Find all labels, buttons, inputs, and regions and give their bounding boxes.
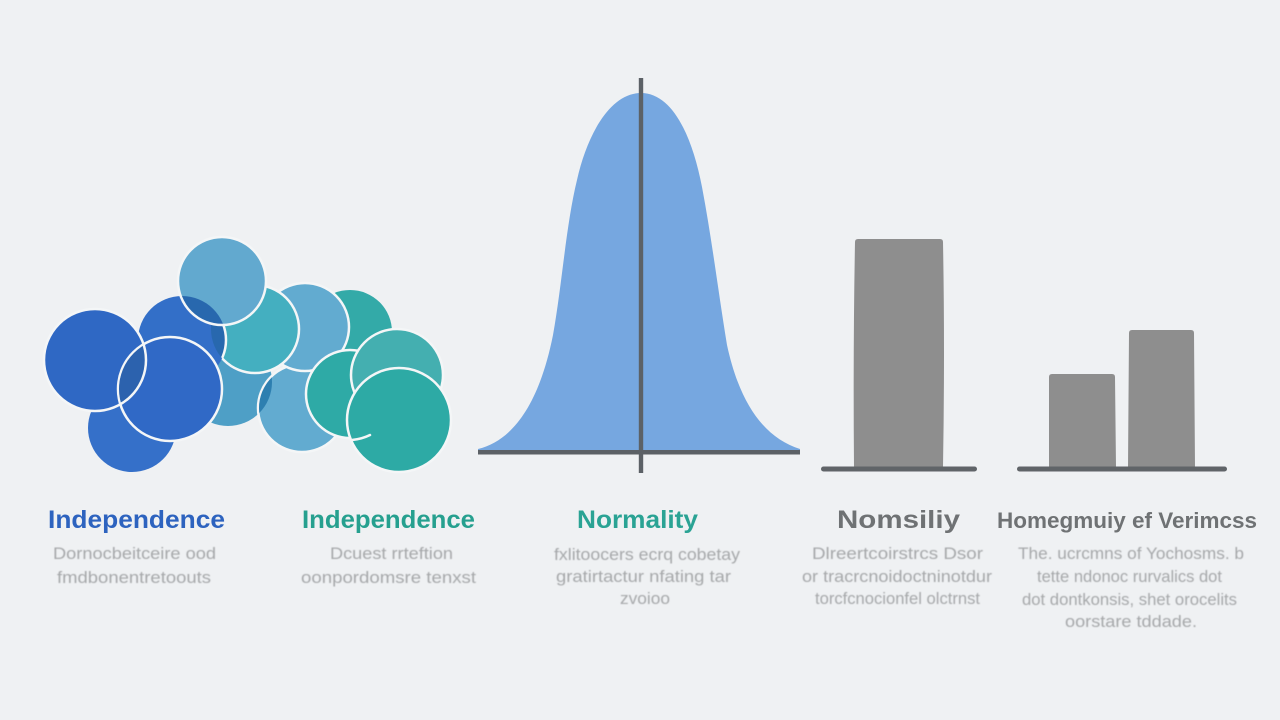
- body text: or tracrcnoidoctninotdur: [802, 567, 992, 586]
- overlapping circles illustration: [44, 237, 451, 472]
- circle: rear teal: [308, 290, 392, 374]
- overlap: rear blue and top circle: [182, 296, 223, 324]
- circle: lower teal: [306, 350, 394, 438]
- body text: [802, 544, 992, 608]
- column 5 text: [997, 508, 1257, 631]
- body text: [1018, 544, 1244, 631]
- center axis: [639, 78, 643, 473]
- overlap: rear blue and cyan teal: [211, 325, 225, 357]
- column 3 text: [554, 506, 741, 608]
- heading: Independence: Independence: [48, 506, 225, 534]
- circle: rear blue: [138, 296, 226, 384]
- body text: oonpordomsre tenxst: [301, 568, 476, 587]
- heading: Normality: Normality: [577, 506, 698, 534]
- paired bar chart: [1017, 330, 1227, 472]
- body text: oorstare tddade.: [1065, 612, 1197, 631]
- body text: Dornocbeitceire ood: [53, 544, 216, 563]
- circle: lower light blue: [258, 364, 346, 452]
- body text: fmdbonentretoouts: [57, 568, 211, 587]
- circle: lower blue: [88, 384, 176, 472]
- single bar chart: [821, 239, 977, 472]
- heading: Nomsiliy: Nomsiliy: [837, 506, 960, 534]
- arc: rear blue edge: [221, 326, 228, 358]
- body text: zvoioo: [620, 589, 670, 608]
- column 1 text: [48, 506, 225, 587]
- outline: top circle: [178, 237, 266, 325]
- baseline: [478, 450, 800, 454]
- body text: dot dontkonsis, shet orocelits: [1022, 590, 1237, 609]
- column 4 text: [802, 506, 992, 608]
- baseline: [1017, 466, 1227, 472]
- bell curve: [478, 93, 800, 452]
- short bar: [1049, 374, 1116, 467]
- tall bar: [854, 239, 944, 467]
- arc: left circle edge over main blue: [120, 345, 148, 405]
- taller bar: [1128, 330, 1195, 467]
- body text: [554, 545, 741, 608]
- circle: main teal: [347, 368, 451, 472]
- circle: mid blue: [184, 338, 272, 426]
- circle: left dark blue: [44, 309, 146, 411]
- column 2 text: [301, 506, 476, 587]
- overlap: left and main blue: [119, 346, 145, 402]
- normal distribution chart: [478, 78, 800, 473]
- body text: [301, 544, 476, 587]
- circle: cyan teal: [211, 285, 299, 373]
- body text: Dlreertcoirstrcs Dsor: [812, 544, 983, 563]
- body text: tette ndonoc rurvalics dot: [1037, 567, 1222, 586]
- body text: The. ucrcmns of Yochosms. b: [1018, 544, 1244, 563]
- heading: Homegmuiy ef Verimcss: Homegmuiy ef Verimcss: [997, 508, 1257, 533]
- body text: [53, 544, 216, 587]
- overlap: mid blue and light blue: [259, 377, 272, 413]
- body text: fxlitoocers ecrq cobetay: [554, 545, 741, 564]
- arc: small white curve: [352, 435, 370, 440]
- circle: top light blue: [178, 237, 266, 325]
- circle: main blue: [118, 337, 222, 441]
- baseline: [821, 466, 977, 472]
- circle: upper light blue: [261, 283, 349, 371]
- body text: Dcuest rrteftion: [330, 544, 453, 563]
- body text: gratirtactur nfating tar: [556, 567, 731, 586]
- body text: torcfcnocionfel olctrnst: [815, 589, 980, 608]
- heading: Independence: Independence: [302, 506, 475, 534]
- circle: upper right teal: [351, 329, 443, 421]
